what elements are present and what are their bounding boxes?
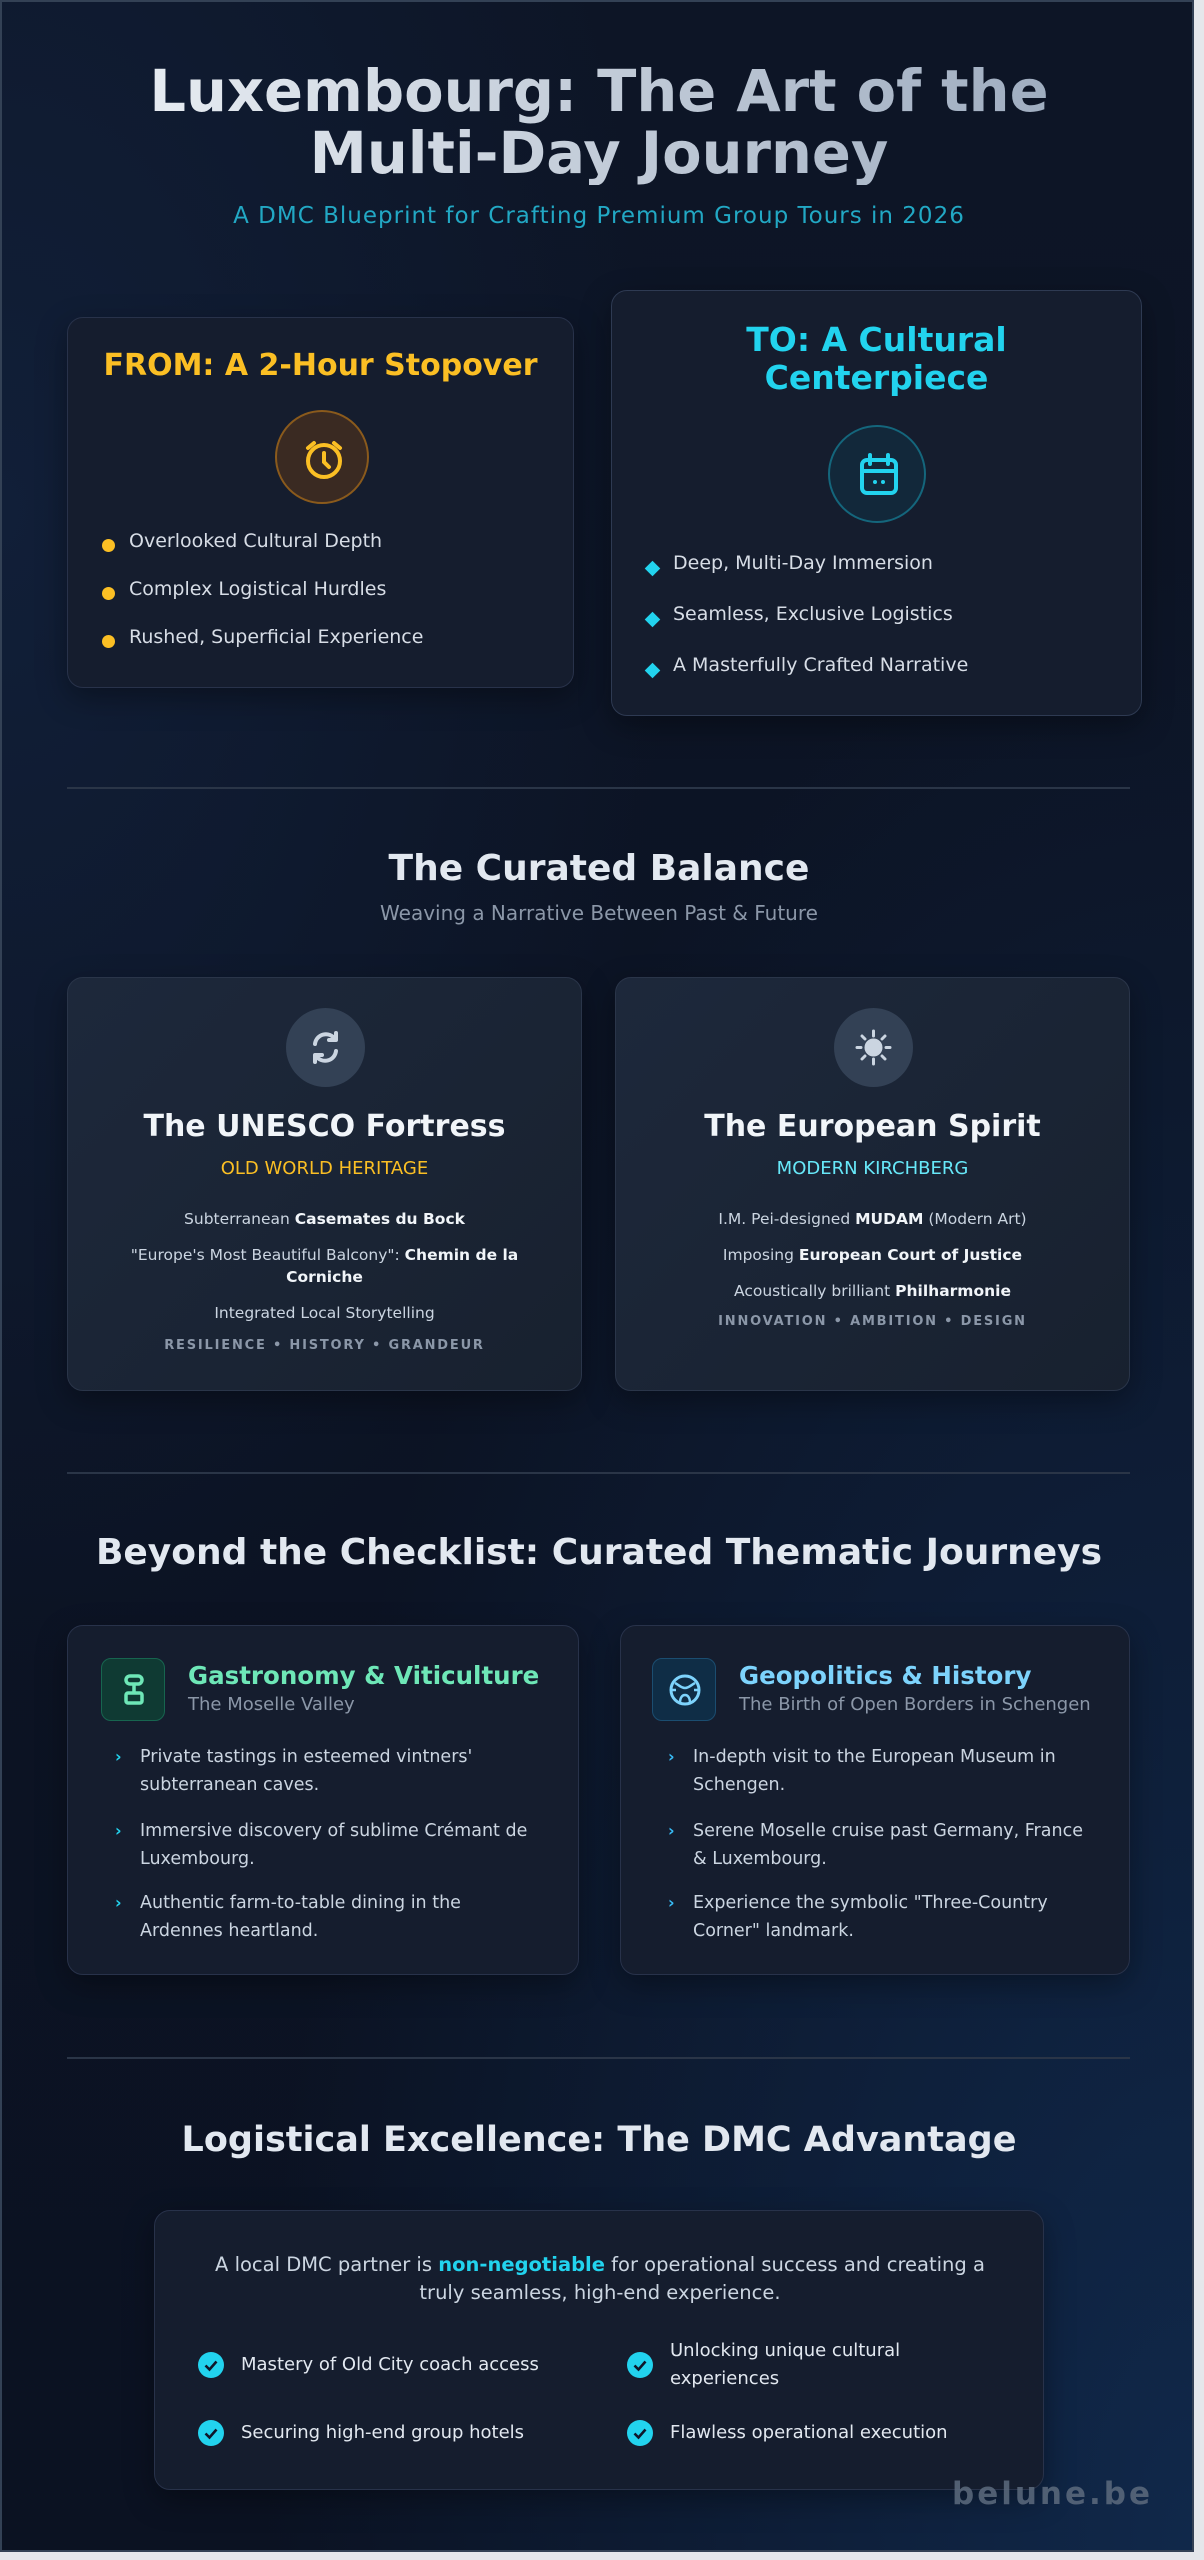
list: gastronomy: › [115,1893,122,1912]
heading: european spirit: The European Spirit [704,1109,1041,1144]
list: geopolitics: Serene Moselle cruise past Germany, France & Luxembourg. [693,1821,1083,1869]
label: old world heritage: OLD WORLD HERITAGE [221,1158,428,1179]
heading: logistical excellence: Logistical Excellence: The DMC Advantage [182,2120,1016,2160]
panel: unesco fortress [67,977,582,1391]
list: gastronomy: Authentic farm-to-table dining in the Ardennes heartland. [140,1893,461,1941]
text: kirchberg highlights: Imposing European Court of Justice [723,1246,1022,1264]
text: kirchberg highlights: I.M. Pei-designed MUDAM (Modern Art) [718,1210,1027,1228]
list: to: Deep, Multi-Day Immersion [673,552,933,574]
subheading: schengen: The Birth of Open Borders in Schengen [739,1694,1091,1715]
panel: european spirit [615,977,1130,1391]
text: kirchberg highlights: Acoustically brilliant Philharmonie [734,1282,1011,1300]
checklist: Unlocking unique cultural experiences [670,2340,900,2389]
icon: alarm clock [275,410,369,504]
heading: geopolitics: Geopolitics & History [739,1661,1031,1690]
list: geopolitics: › [668,1747,675,1766]
text: fortress highlights [131,1210,518,1353]
list: from: Overlooked Cultural Depth [129,530,382,552]
title: Multi-Day Journey [310,120,888,187]
list: gastronomy: Private tastings in esteemed vintners' subterranean caves. [140,1747,472,1795]
list: gastronomy: › [115,1821,122,1840]
heading: to: TO: A Cultural [746,320,1007,359]
checklist: Securing high-end group hotels [241,2422,524,2443]
list: from [102,530,423,648]
subheading: moselle valley: The Moselle Valley [188,1694,355,1715]
text: fortress highlights: Subterranean Casemates du Bock [184,1210,465,1228]
list: geopolitics: In-depth visit to the European Museum in Schengen. [693,1747,1056,1795]
text: fortress highlights: RESILIENCE • HISTORY • GRANDEUR [164,1338,485,1353]
panel: to [611,290,1142,716]
checklist: Flawless operational execution [670,2422,948,2443]
heading: from: FROM: A 2-Hour Stopover [103,348,538,383]
subtitle: A DMC Blueprint for Crafting Premium Group Tours in 2026 [233,203,965,229]
heading: unesco fortress: The UNESCO Fortress [143,1109,506,1144]
heading: to [746,320,1007,397]
list: from: Rushed, Superficial Experience [129,626,423,648]
text: fortress highlights: Integrated Local Storytelling [214,1304,435,1322]
list: geopolitics: Experience the symbolic "Three-Country Corner" landmark. [693,1893,1048,1941]
icon: wine [101,1658,165,1721]
title: Luxembourg: The Art of the [149,58,1049,125]
label: modern kirchberg: MODERN KIRCHBERG [777,1158,968,1179]
text: fortress highlights: "Europe's Most Beautiful Balcony": Chemin de la Corniche [131,1246,518,1286]
watermark: belune.be: belune.be [952,2476,1153,2512]
list: to: A Masterfully Crafted Narrative [673,654,968,676]
panel: from [67,317,574,688]
icon: sun [834,1008,913,1087]
icon: rotate [286,1008,365,1087]
panel: geopolitics [620,1625,1130,1975]
list: gastronomy: › [115,1747,122,1766]
text: kirchberg highlights [718,1210,1027,1329]
list: geopolitics: › [668,1821,675,1840]
heading: curated balance: The Curated Balance [389,848,809,889]
panel: gastronomy [67,1625,579,1975]
panel: dmc advantage [154,2210,1044,2490]
text: kirchberg highlights: INNOVATION • AMBITION • DESIGN [718,1314,1027,1329]
heading: gastronomy: Gastronomy & Viticulture [188,1661,539,1690]
list: to [644,552,968,678]
heading: to: Centerpiece [765,358,988,397]
list: gastronomy [115,1747,527,1941]
list: gastronomy: Immersive discovery of sublime Crémant de Luxembourg. [140,1821,527,1869]
icon: calendar [828,425,926,523]
list: to: Seamless, Exclusive Logistics [673,603,953,625]
list: geopolitics [668,1747,1083,1941]
heading: thematic journeys: Beyond the Checklist: Curated Thematic Journeys [96,1532,1102,1573]
checklist [198,2340,948,2446]
title [2,61,1196,185]
subheading: curated balance: Weaving a Narrative Between Past & Future [380,901,818,925]
list: from: Complex Logistical Hurdles [129,578,386,600]
checklist: Mastery of Old City coach access [241,2354,539,2375]
text: dmc statement: A local DMC partner is non-negotiable for operational success and creating a truly seamless, high-end experience. [215,2253,985,2304]
list: geopolitics: › [668,1893,675,1912]
icon: globe [652,1658,716,1721]
